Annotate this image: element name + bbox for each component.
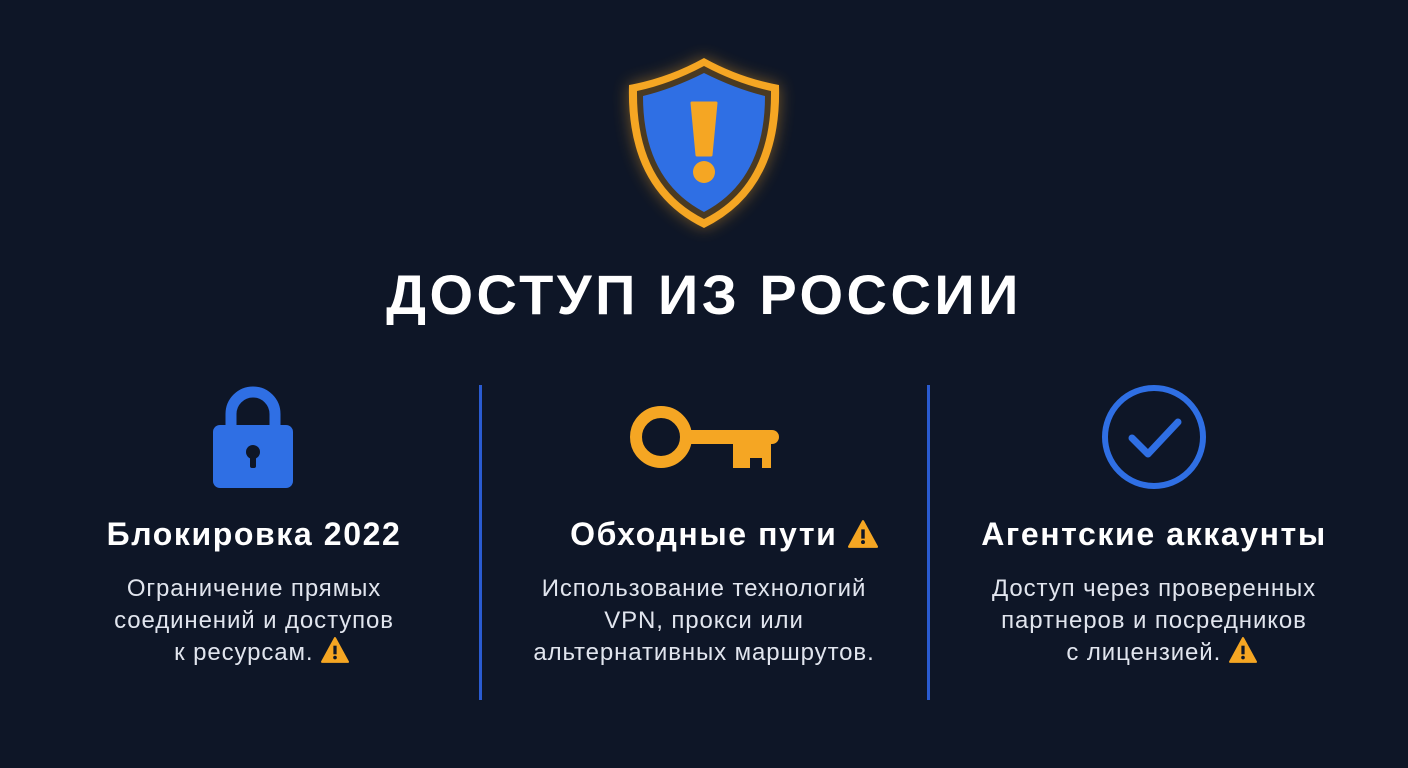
text: column 3: [992, 575, 1316, 666]
heading: Агентские аккаунты: Агентские аккаунты: [981, 516, 1327, 552]
divider: [479, 385, 482, 700]
icon: key: [630, 406, 779, 468]
icon: lock: [213, 386, 293, 488]
text: column 1: к ресурсам.: [174, 639, 313, 666]
title: ДОСТУП ИЗ РОССИИ: [386, 263, 1022, 326]
text: column 2: VPN, прокси или: [604, 607, 804, 634]
heading: Блокировка 2022: Блокировка 2022: [107, 516, 401, 552]
text: column 3: партнеров и посредников: [1001, 607, 1307, 634]
icon: shield with exclamation: [618, 50, 790, 236]
text: column 2: [533, 575, 875, 666]
text: column 2: альтернативных маршрутов.: [533, 639, 875, 666]
icon: check circle: [1102, 385, 1206, 489]
text: column 1: [114, 575, 394, 666]
text: column 1: соединений и доступов: [114, 607, 394, 634]
text: column 3: Доступ через проверенных: [992, 575, 1316, 602]
text: column 2: Использование технологий: [542, 575, 866, 602]
heading: Обходные пути: Обходные пути: [570, 516, 837, 552]
text: column 3: с лицензией.: [1066, 639, 1221, 666]
text: column 1: Ограничение прямых: [127, 575, 381, 602]
divider: [927, 385, 930, 700]
